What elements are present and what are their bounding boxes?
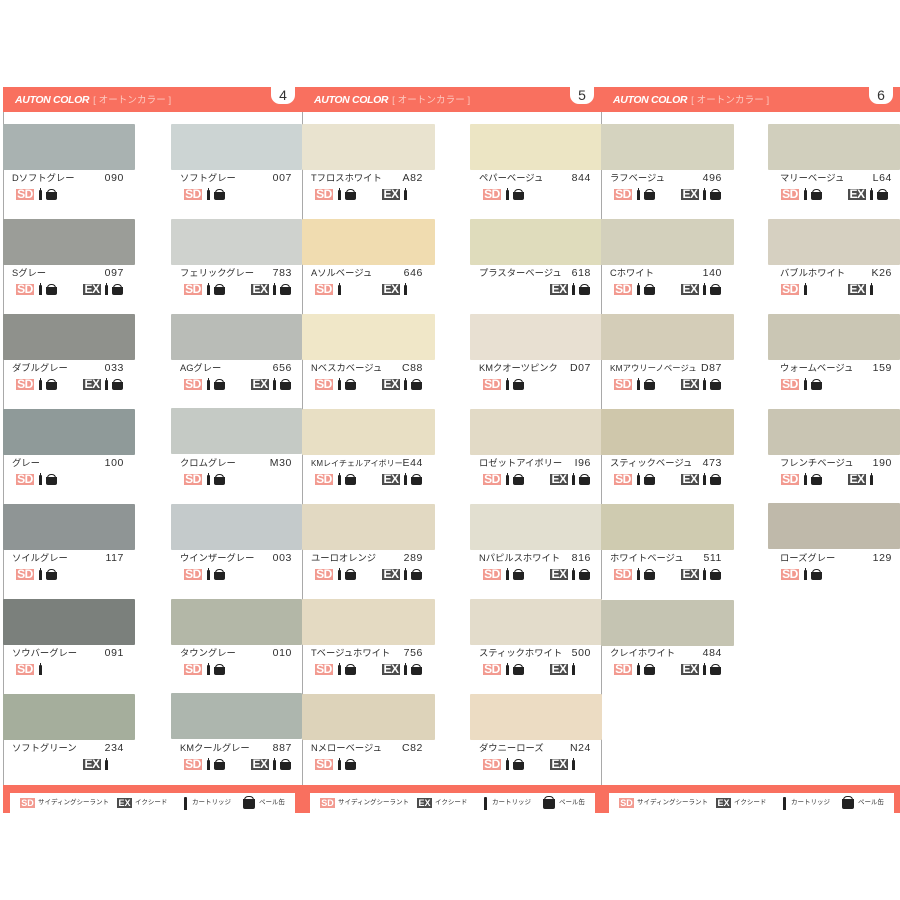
footer legend: page 4: カートリッジ — [192, 799, 231, 806]
colour card: ウォームベージュ 159: ウォームベージュ — [780, 363, 853, 373]
colour card: ウインザーグレー 003 — [171, 504, 302, 581]
colour card: Dソフトグレー 090: SD — [17, 187, 33, 201]
colour card: Dソフトグレー 090: 090 — [105, 172, 124, 184]
colour card: ローズグレー 129 — [768, 503, 900, 581]
colour card: ダブルグレー 033: SD — [17, 377, 33, 391]
footer legend: page 6: ペール缶 — [858, 799, 884, 806]
colour card: ソフトグリーン 234: 234 — [105, 742, 124, 754]
colour card: クロムグレー M30: クロムグレー — [180, 458, 236, 468]
colour card: ウインザーグレー 003: SD — [185, 567, 201, 581]
colour card: ペパーベージュ 844: ペパーベージュ — [479, 173, 543, 183]
colour card: マリーベージュ L64: L64 — [873, 172, 892, 184]
header band: page 5 — [302, 87, 601, 112]
colour card: クロムグレー M30 — [171, 408, 302, 486]
colour card: ホワイトベージュ 511: EX — [682, 567, 698, 581]
colour card: ダウニーローズ N24: ダウニーローズ — [479, 743, 544, 753]
colour card: ダウニーローズ N24: SD — [484, 757, 500, 771]
colour card: Aソルベージュ 646: 646 — [404, 267, 423, 279]
footer legend: page 4: ペール缶 — [259, 799, 285, 806]
colour card: クレイホワイト 484: SD — [615, 662, 631, 676]
colour card: ペパーベージュ 844: SD — [484, 187, 500, 201]
colour card: KMクールグレー 887: SD — [185, 757, 201, 771]
colour card: タウングレー 010: SD — [185, 662, 201, 676]
colour card: KMクオーツピンク D07: KMクオーツピンク — [479, 363, 558, 373]
colour card: Sグレー 097: 097 — [105, 267, 124, 279]
colour card: フェリックグレー 783: EX — [252, 282, 268, 296]
colour card: Aソルベージュ 646: Aソルベージュ — [311, 268, 372, 278]
colour card: フレンチベージュ 190: SD — [782, 472, 798, 486]
colour card: AGグレー 656: EX — [252, 377, 268, 391]
colour card: Tフロスホワイト A82 — [302, 124, 435, 201]
colour card: バブルホワイト K26: K26 — [872, 267, 892, 279]
colour card: KMクールグレー 887: KMクールグレー — [180, 743, 250, 753]
footer legend: page 4: SD — [21, 798, 34, 808]
colour card: マリーベージュ L64 — [768, 124, 900, 201]
colour card: スティックベージュ 473: EX — [682, 472, 698, 486]
colour card: ウォームベージュ 159: 159 — [873, 362, 892, 374]
colour card: ロゼットアイボリー I96: SD — [484, 472, 500, 486]
colour card: Nパピルスホワイト 816: Nパピルスホワイト — [479, 553, 560, 563]
colour card: Nパピルスホワイト 816: 816 — [572, 552, 591, 564]
colour card: スティックホワイト 500: EX — [551, 662, 566, 676]
colour card: バブルホワイト K26: EX — [849, 282, 864, 296]
colour card: ソフトグリーン 234: ソフトグリーン — [12, 743, 77, 753]
footer legend: page 6 — [601, 785, 900, 813]
colour card: ソウバーグレー 091: ソウバーグレー — [12, 648, 77, 658]
colour card: ソフトグレー 007: SD — [185, 187, 201, 201]
colour card: ユーロオレンジ 289: 289 — [404, 552, 423, 564]
colour card: ソフトグレー 007: ソフトグレー — [180, 173, 236, 183]
colour card: Cホワイト 140: EX — [682, 282, 698, 296]
colour card: ペパーベージュ 844: 844 — [572, 172, 591, 184]
colour card: ダブルグレー 033 — [3, 314, 135, 391]
colour card: グレー 100: SD — [17, 472, 33, 486]
colour card: ソイルグレー 117: SD — [17, 567, 33, 581]
colour card: グレー 100: 100 — [105, 457, 124, 469]
footer legend: page 4: イクシード — [135, 799, 167, 806]
colour card: ホワイトベージュ 511: 511 — [703, 552, 722, 564]
colour card: Nメローベージュ C82: C82 — [402, 742, 423, 754]
colour card: クレイホワイト 484: EX — [682, 662, 698, 676]
colour card: Nメローベージュ C82: SD — [316, 757, 332, 771]
colour card: Cホワイト 140 — [601, 219, 734, 296]
colour card: ユーロオレンジ 289 — [302, 504, 435, 581]
colour card: スティックベージュ 473: 473 — [703, 457, 722, 469]
footer legend: page 6: サイディングシーラント — [637, 799, 708, 806]
colour card: ダウニーローズ N24: N24 — [570, 742, 591, 754]
colour card: KMレイチェルアイボリー E44 — [302, 409, 435, 486]
footer legend: page 5: ペール缶 — [559, 799, 585, 806]
colour card: Tフロスホワイト A82: SD — [316, 187, 332, 201]
footer legend: page 5: カートリッジ — [492, 799, 531, 806]
colour card: ペパーベージュ 844 — [470, 124, 602, 201]
colour card: KMクールグレー 887: EX — [252, 757, 268, 771]
footer legend: page 4 — [3, 785, 302, 813]
colour card: AGグレー 656: 656 — [273, 362, 292, 374]
colour card: フレンチベージュ 190: フレンチベージュ — [780, 458, 854, 468]
colour card: Sグレー 097 — [3, 219, 135, 296]
header band: page 6: AUTON COLOR [ オートンカラー ] — [613, 94, 769, 106]
colour card: マリーベージュ L64: SD — [782, 187, 798, 201]
colour card: AGグレー 656: AGグレー — [180, 363, 221, 373]
colour card: スティックベージュ 473 — [601, 409, 734, 486]
colour card: ウォームベージュ 159 — [768, 314, 900, 391]
colour card: KMアウリーノベージュ D87: D87 — [701, 362, 722, 374]
colour card: ロゼットアイボリー I96: I96 — [575, 457, 591, 469]
colour card: Nメローベージュ C82: Nメローベージュ — [311, 743, 382, 753]
colour card: タウングレー 010: タウングレー — [180, 648, 236, 658]
colour card: KMレイチェルアイボリー E44: E44 — [403, 457, 423, 469]
header band: page 4: AUTON COLOR [ オートンカラー ] — [15, 94, 171, 106]
colour card: ダウニーローズ N24: EX — [551, 757, 566, 771]
colour card: KMアウリーノベージュ D87: KMアウリーノベージュ — [610, 363, 697, 373]
colour card: クレイホワイト 484: クレイホワイト — [610, 648, 675, 658]
colour card: ユーロオレンジ 289: SD — [316, 567, 332, 581]
footer legend: page 5 — [302, 785, 601, 813]
footer legend: page 4: サイディングシーラント — [38, 799, 109, 806]
colour card: Tベージュホワイト 756: Tベージュホワイト — [311, 648, 390, 658]
header band: page 4: 4 — [279, 87, 287, 103]
colour card: Nベスカベージュ C88: Nベスカベージュ — [311, 363, 382, 373]
colour card: KMクオーツピンク D07: SD — [484, 377, 500, 391]
colour card: Nパピルスホワイト 816 — [470, 504, 602, 581]
colour card: ソフトグリーン 234: EX — [84, 757, 100, 771]
colour card: Cホワイト 140: 140 — [703, 267, 722, 279]
header band: page 6: 6 — [877, 87, 885, 103]
colour card: Sグレー 097: Sグレー — [12, 268, 46, 278]
header band: page 4 — [3, 87, 302, 112]
colour card: フェリックグレー 783: SD — [185, 282, 201, 296]
colour card: Tベージュホワイト 756: SD — [316, 662, 332, 676]
colour card: フェリックグレー 783: 783 — [273, 267, 292, 279]
colour card: タウングレー 010 — [171, 599, 302, 676]
colour card: ソウバーグレー 091 — [3, 599, 135, 676]
colour card: スティックベージュ 473: スティックベージュ — [610, 458, 692, 468]
colour card: ラフベージュ 496: ラフベージュ — [610, 173, 665, 183]
colour card: KMクオーツピンク D07 — [470, 314, 602, 391]
colour card: Sグレー 097: EX — [84, 282, 100, 296]
colour card: ウインザーグレー 003: ウインザーグレー — [180, 553, 254, 563]
colour card: Sグレー 097: SD — [17, 282, 33, 296]
colour card: マリーベージュ L64: EX — [849, 187, 864, 201]
colour card: Nベスカベージュ C88 — [302, 314, 435, 391]
colour card: フェリックグレー 783 — [171, 219, 302, 296]
colour card: ホワイトベージュ 511: SD — [615, 567, 631, 581]
colour card: Nパピルスホワイト 816: SD — [484, 567, 500, 581]
colour card: ソフトグレー 007: 007 — [273, 172, 292, 184]
colour card: ラフベージュ 496: 496 — [703, 172, 722, 184]
colour card: フレンチベージュ 190: EX — [849, 472, 864, 486]
colour card: Tフロスホワイト A82: A82 — [403, 172, 423, 184]
footer legend: page 6: SD — [620, 798, 633, 808]
colour card: Tフロスホワイト A82: Tフロスホワイト — [311, 173, 382, 183]
colour card: グレー 100 — [3, 409, 135, 486]
colour card: ソイルグレー 117 — [3, 504, 135, 581]
colour card: ローズグレー 129: ローズグレー — [780, 553, 835, 563]
colour card: ラフベージュ 496: EX — [682, 187, 698, 201]
colour card: バブルホワイト K26 — [768, 219, 900, 296]
colour card: KMレイチェルアイボリー E44: EX — [383, 472, 398, 486]
colour card: スティックホワイト 500: SD — [484, 662, 500, 676]
colour card: ダブルグレー 033: EX — [84, 377, 100, 391]
colour card: スティックホワイト 500: 500 — [572, 647, 591, 659]
colour card: Dソフトグレー 090 — [3, 124, 135, 201]
colour card: KMアウリーノベージュ D87: EX — [682, 377, 698, 391]
colour card: KMアウリーノベージュ D87 — [601, 314, 734, 391]
colour card: ソフトグリーン 234 — [3, 694, 135, 771]
footer legend: page 5: サイディングシーラント — [338, 799, 409, 806]
colour card: Aソルベージュ 646: SD — [316, 282, 332, 296]
colour card: グレー 100: グレー — [12, 458, 40, 468]
colour card: ユーロオレンジ 289: EX — [383, 567, 398, 581]
colour card: Nメローベージュ C82 — [302, 694, 435, 771]
colour card: Nベスカベージュ C88: C88 — [402, 362, 423, 374]
colour card: KMクールグレー 887: 887 — [273, 742, 292, 754]
colour card: ダブルグレー 033: 033 — [105, 362, 124, 374]
colour card: Tフロスホワイト A82: EX — [383, 187, 398, 201]
colour card: ウインザーグレー 003: 003 — [273, 552, 292, 564]
colour card: ロゼットアイボリー I96: EX — [551, 472, 566, 486]
colour card: プラスターベージュ 618: プラスターベージュ — [479, 268, 562, 278]
colour card: バブルホワイト K26: バブルホワイト — [780, 268, 845, 278]
colour card: ホワイトベージュ 511: ホワイトベージュ — [610, 553, 684, 563]
colour card: クレイホワイト 484: 484 — [703, 647, 722, 659]
footer legend: page 5: SD — [321, 798, 334, 808]
colour card: Dソフトグレー 090: Dソフトグレー — [12, 173, 74, 183]
colour card: クロムグレー M30: M30 — [270, 457, 292, 469]
colour card: KMクールグレー 887 — [171, 693, 302, 771]
footer legend: page 6: イクシード — [734, 799, 766, 806]
colour card: Tベージュホワイト 756 — [302, 599, 435, 676]
footer legend: page 4: EX — [118, 798, 130, 808]
colour card: KMアウリーノベージュ D87: SD — [615, 377, 631, 391]
colour card: ローズグレー 129: 129 — [873, 552, 892, 564]
colour card: ローズグレー 129: SD — [782, 567, 798, 581]
colour card: ソフトグレー 007 — [171, 124, 302, 201]
colour card: スティックホワイト 500: スティックホワイト — [479, 648, 562, 658]
colour card: AGグレー 656: SD — [185, 377, 201, 391]
colour card: KMレイチェルアイボリー E44: KMレイチェルアイボリー — [311, 459, 403, 468]
colour card: ソウバーグレー 091: SD — [17, 662, 33, 676]
colour card: クレイホワイト 484 — [601, 600, 734, 676]
colour card: ラフベージュ 496 — [601, 124, 734, 201]
colour card: ホワイトベージュ 511 — [601, 504, 734, 581]
colour card: ソウバーグレー 091: 091 — [105, 647, 124, 659]
header band: page 6 — [601, 87, 900, 112]
colour card: ソイルグレー 117: ソイルグレー — [12, 553, 68, 563]
colour card: KMレイチェルアイボリー E44: SD — [316, 472, 332, 486]
colour card: フェリックグレー 783: フェリックグレー — [180, 268, 254, 278]
footer legend: page 5: EX — [418, 798, 430, 808]
colour card: ソイルグレー 117: 117 — [105, 552, 124, 564]
colour card: Tベージュホワイト 756: EX — [383, 662, 398, 676]
colour card: スティックベージュ 473: SD — [615, 472, 631, 486]
colour card: Nパピルスホワイト 816: EX — [551, 567, 566, 581]
colour card: フレンチベージュ 190: 190 — [873, 457, 892, 469]
colour card: クロムグレー M30: SD — [185, 472, 201, 486]
footer legend: page 6: カートリッジ — [791, 799, 830, 806]
colour card: Cホワイト 140: Cホワイト — [610, 268, 654, 278]
colour card: ロゼットアイボリー I96: ロゼットアイボリー — [479, 458, 562, 468]
colour card: AGグレー 656 — [171, 314, 302, 391]
colour card: ラフベージュ 496: SD — [615, 187, 631, 201]
colour card: マリーベージュ L64: マリーベージュ — [780, 173, 844, 183]
header band: page 5: AUTON COLOR [ オートンカラー ] — [314, 94, 470, 106]
colour card: プラスターベージュ 618: EX — [551, 282, 566, 296]
colour card: ユーロオレンジ 289: ユーロオレンジ — [311, 553, 376, 563]
colour card: フレンチベージュ 190 — [768, 409, 900, 486]
colour card: Aソルベージュ 646 — [302, 219, 435, 296]
colour card: Nベスカベージュ C88: SD — [316, 377, 332, 391]
footer legend: page 6: EX — [717, 798, 730, 808]
header band: page 5: 5 — [578, 87, 586, 103]
colour card: ウォームベージュ 159: SD — [782, 377, 798, 391]
colour card: Aソルベージュ 646: EX — [383, 282, 398, 296]
colour card: プラスターベージュ 618: 618 — [572, 267, 591, 279]
colour card: ロゼットアイボリー I96 — [470, 409, 602, 486]
colour card: プラスターベージュ 618 — [470, 219, 602, 296]
colour card: ダウニーローズ N24 — [470, 694, 602, 771]
colour card: タウングレー 010: 010 — [273, 647, 292, 659]
colour card: KMクオーツピンク D07: D07 — [570, 362, 591, 374]
colour card: バブルホワイト K26: SD — [782, 282, 798, 296]
footer legend: page 5: イクシード — [435, 799, 467, 806]
colour card: スティックホワイト 500 — [470, 599, 602, 676]
colour card: Cホワイト 140: SD — [615, 282, 631, 296]
colour card: Nベスカベージュ C88: EX — [383, 377, 398, 391]
colour card: Tベージュホワイト 756: 756 — [404, 647, 423, 659]
colour card: ダブルグレー 033: ダブルグレー — [12, 363, 68, 373]
